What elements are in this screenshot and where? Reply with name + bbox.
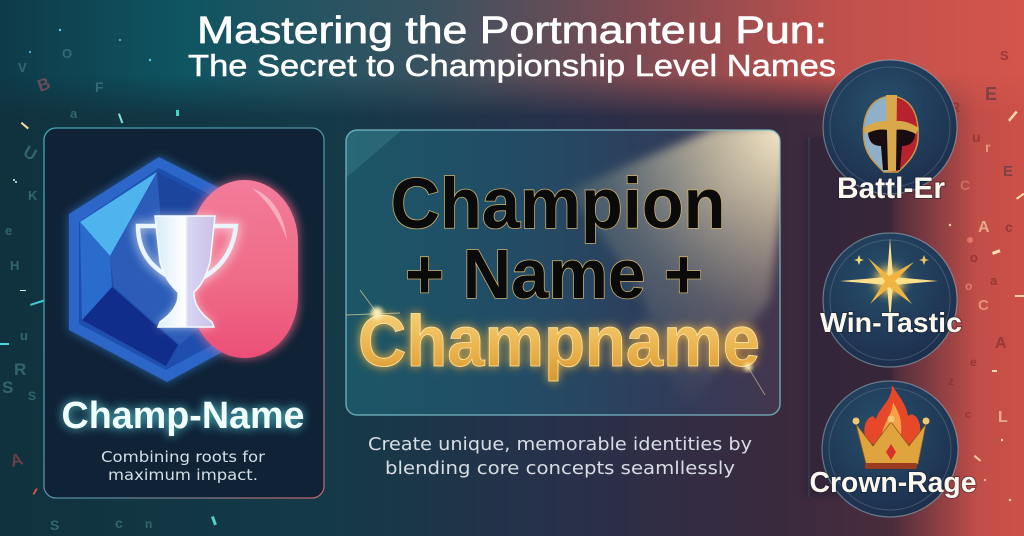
particles left [0, 29, 217, 525]
scattered letters left: R [14, 360, 26, 379]
scattered letters right: u [972, 129, 981, 145]
scattered letters left: S [2, 378, 13, 397]
scattered letters left: n [145, 517, 152, 531]
scattered letters right: a [990, 273, 998, 288]
scattered letters left: F [95, 79, 104, 95]
caption: create unique identities: Create unique, memorable identities by [368, 434, 752, 455]
scattered letters left [2, 46, 152, 533]
caption: combining roots [101, 448, 266, 484]
scattered letters left: O [62, 46, 72, 61]
caption: combining roots: maximum impact. [108, 466, 258, 484]
scattered letters left: H [10, 258, 19, 273]
scattered letters right: S [1000, 48, 1009, 63]
scattered letters right: e [970, 355, 977, 369]
scattered letters right: C [960, 177, 970, 193]
badge: Crown-Rage [810, 381, 976, 517]
scattered letters right: A [978, 219, 990, 236]
spotlight beam [572, 130, 780, 383]
scattered letters left: V [18, 60, 27, 75]
scattered letters right [948, 48, 1013, 426]
heading: Champ-Name: Champ-Name [62, 395, 304, 437]
scattered letters right: o [965, 279, 972, 293]
scattered letters right: o [970, 250, 978, 265]
scattered letters left: U [20, 142, 40, 165]
icon: helmet [863, 95, 919, 172]
caption: combining roots: Combining roots for [101, 448, 266, 466]
scattered letters right: A [995, 335, 1007, 352]
scattered letters left: S [50, 517, 59, 533]
scattered letters right: z [948, 374, 954, 388]
formula: plus Name plus: + Name + [405, 235, 703, 313]
panel: formula [346, 122, 790, 418]
scattered letters right: L [998, 409, 1008, 426]
scattered letters left: S [28, 389, 36, 403]
title: Mastering the Portmanteıu Pun: [197, 10, 827, 52]
panel: Champ-Name [44, 128, 324, 498]
scattered letters right: R [950, 99, 960, 115]
scattered letters right: c [965, 409, 971, 421]
formula: Champion: Champion [390, 165, 726, 244]
label: Crown-Rage: Crown-Rage [810, 467, 976, 499]
label: Win-Tastic: Win-Tastic [820, 307, 962, 338]
caption: create unique identities: blending core concepts seamllessly [385, 458, 735, 479]
icon: star burst [840, 238, 938, 322]
icon: flaming crown [852, 385, 930, 469]
title [188, 10, 836, 83]
side rail behind badges [803, 137, 893, 497]
scattered letters left: u [20, 328, 28, 343]
scattered letters left: A [8, 449, 25, 471]
scattered letters left: B [35, 74, 53, 96]
scattered letters right: C [978, 297, 989, 314]
scattered letters left: a [70, 106, 78, 121]
icon: blue hexagon gem with pink capsule and trophy [69, 157, 298, 382]
heading: Champ-Name: Champ-Name [62, 395, 304, 437]
badge: Battl-Er [823, 60, 957, 205]
formula result: Champname: Champname [358, 302, 760, 382]
label: Battl-Er: Battl-Er [837, 172, 945, 205]
scattered letters right: E [985, 84, 997, 104]
title: The Secret to Championship Level Names [188, 48, 836, 83]
formula result: Champname: Champname [358, 302, 760, 382]
trophy [138, 216, 236, 327]
pink capsule [191, 180, 298, 358]
badge: Win-Tastic [820, 233, 962, 367]
scattered letters right: E [1003, 163, 1013, 180]
particles right [949, 111, 1024, 501]
scattered letters right: r [985, 139, 991, 155]
scattered letters left: K [28, 188, 38, 203]
scattered letters left: c [115, 515, 123, 531]
caption: create unique identities [368, 434, 752, 479]
scattered letters left: e [5, 223, 12, 238]
scattered letters right: c [1005, 219, 1013, 235]
